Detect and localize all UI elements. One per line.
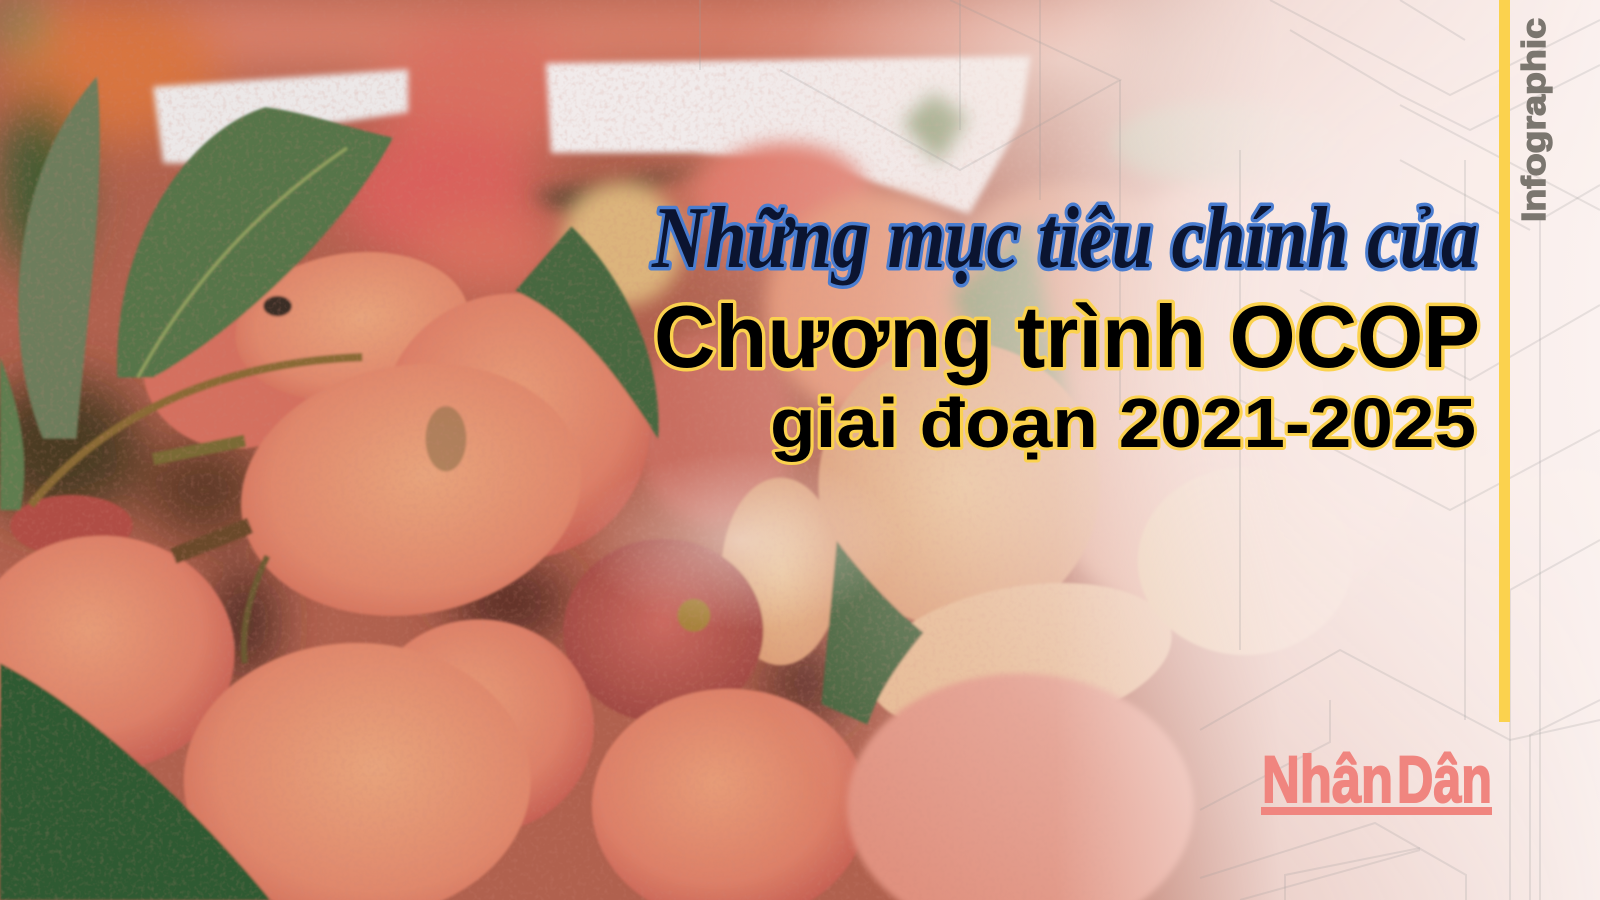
title line 2: Chương trình OCOP	[654, 287, 1480, 386]
leaves	[117, 107, 393, 378]
front fruit	[221, 337, 602, 642]
title	[651, 190, 1480, 462]
logo: Nhân Dân: Nhân	[1262, 742, 1393, 816]
yellow vertical rule	[1499, 0, 1510, 722]
back fruit	[143, 286, 327, 449]
label: Infographic: Infographic	[1515, 18, 1552, 222]
hexagon line pattern	[700, 0, 1600, 900]
logo: Nhân Dân: Dân	[1397, 742, 1492, 816]
title line 3: giai đoạn 2021-2025	[770, 384, 1476, 462]
white crates	[153, 56, 1031, 214]
